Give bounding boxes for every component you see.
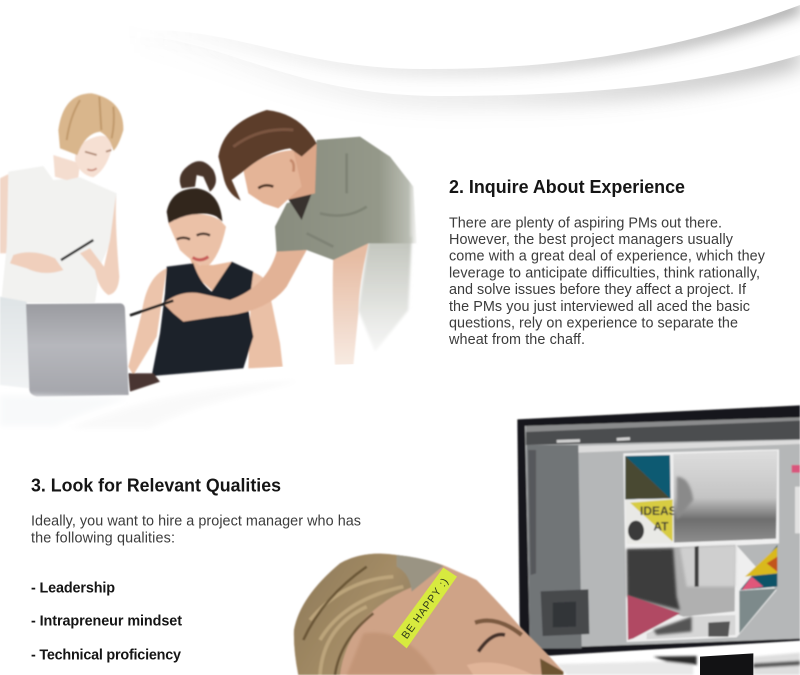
paragraph: experience: questions, rely on experience to separate the bbox=[449, 316, 738, 332]
paragraph: experience: leverage to anticipate difficulties, think rationally, bbox=[449, 265, 760, 281]
list: qualities: - Intrapreneur mindset bbox=[31, 614, 182, 630]
paragraph: qualities intro bbox=[31, 514, 361, 546]
section 2 text bbox=[448, 177, 766, 348]
paragraph: experience bbox=[448, 215, 766, 348]
heading: look for relevant qualities: 3. Look for Relevant Qualities bbox=[31, 476, 281, 496]
heading: inquire about experience: 2. Inquire About Experience bbox=[449, 177, 685, 197]
list: qualities bbox=[31, 580, 182, 663]
decorative top wave bbox=[130, 5, 800, 96]
paragraph: experience: However, the best project managers usually bbox=[449, 232, 734, 248]
paragraph: qualities intro: the following qualities: bbox=[31, 530, 175, 546]
paragraph: experience: and solve issues before they affect a project. If bbox=[449, 282, 747, 298]
man's head bbox=[294, 554, 563, 675]
paragraph: qualities intro: Ideally, you want to hire a project manager who has bbox=[31, 514, 361, 530]
monitor stand bbox=[700, 653, 753, 675]
table surface and lower wave bbox=[0, 362, 430, 440]
label text: BE HAPPY :) bbox=[399, 576, 451, 641]
paragraph: experience: come with a great deal of experience, which they bbox=[449, 249, 766, 265]
photo: three colleagues around a laptop bbox=[0, 93, 417, 397]
woman in white bbox=[0, 93, 123, 388]
collage poster bbox=[623, 449, 779, 642]
desk below monitor bbox=[557, 653, 800, 675]
list: qualities: - Technical proficiency bbox=[31, 647, 181, 663]
paragraph: experience: There are plenty of aspiring PMs out there. bbox=[449, 215, 722, 231]
sticky label bbox=[393, 568, 457, 648]
section 3 text bbox=[31, 476, 361, 663]
laptop bbox=[26, 303, 129, 397]
monitor: AT bbox=[653, 520, 669, 534]
monitor: IDEAS bbox=[640, 504, 677, 518]
photo: man resting in front of a monitor bbox=[294, 405, 800, 675]
man in olive shirt bbox=[130, 110, 417, 365]
dialog panel bbox=[541, 589, 589, 636]
list: qualities: - Leadership bbox=[31, 580, 115, 596]
woman in black dress bbox=[128, 161, 283, 392]
paragraph: experience: the PMs you just interviewed all aced the basic bbox=[449, 299, 750, 315]
monitor bbox=[517, 405, 800, 657]
paragraph: experience: wheat from the chaff. bbox=[448, 332, 585, 348]
